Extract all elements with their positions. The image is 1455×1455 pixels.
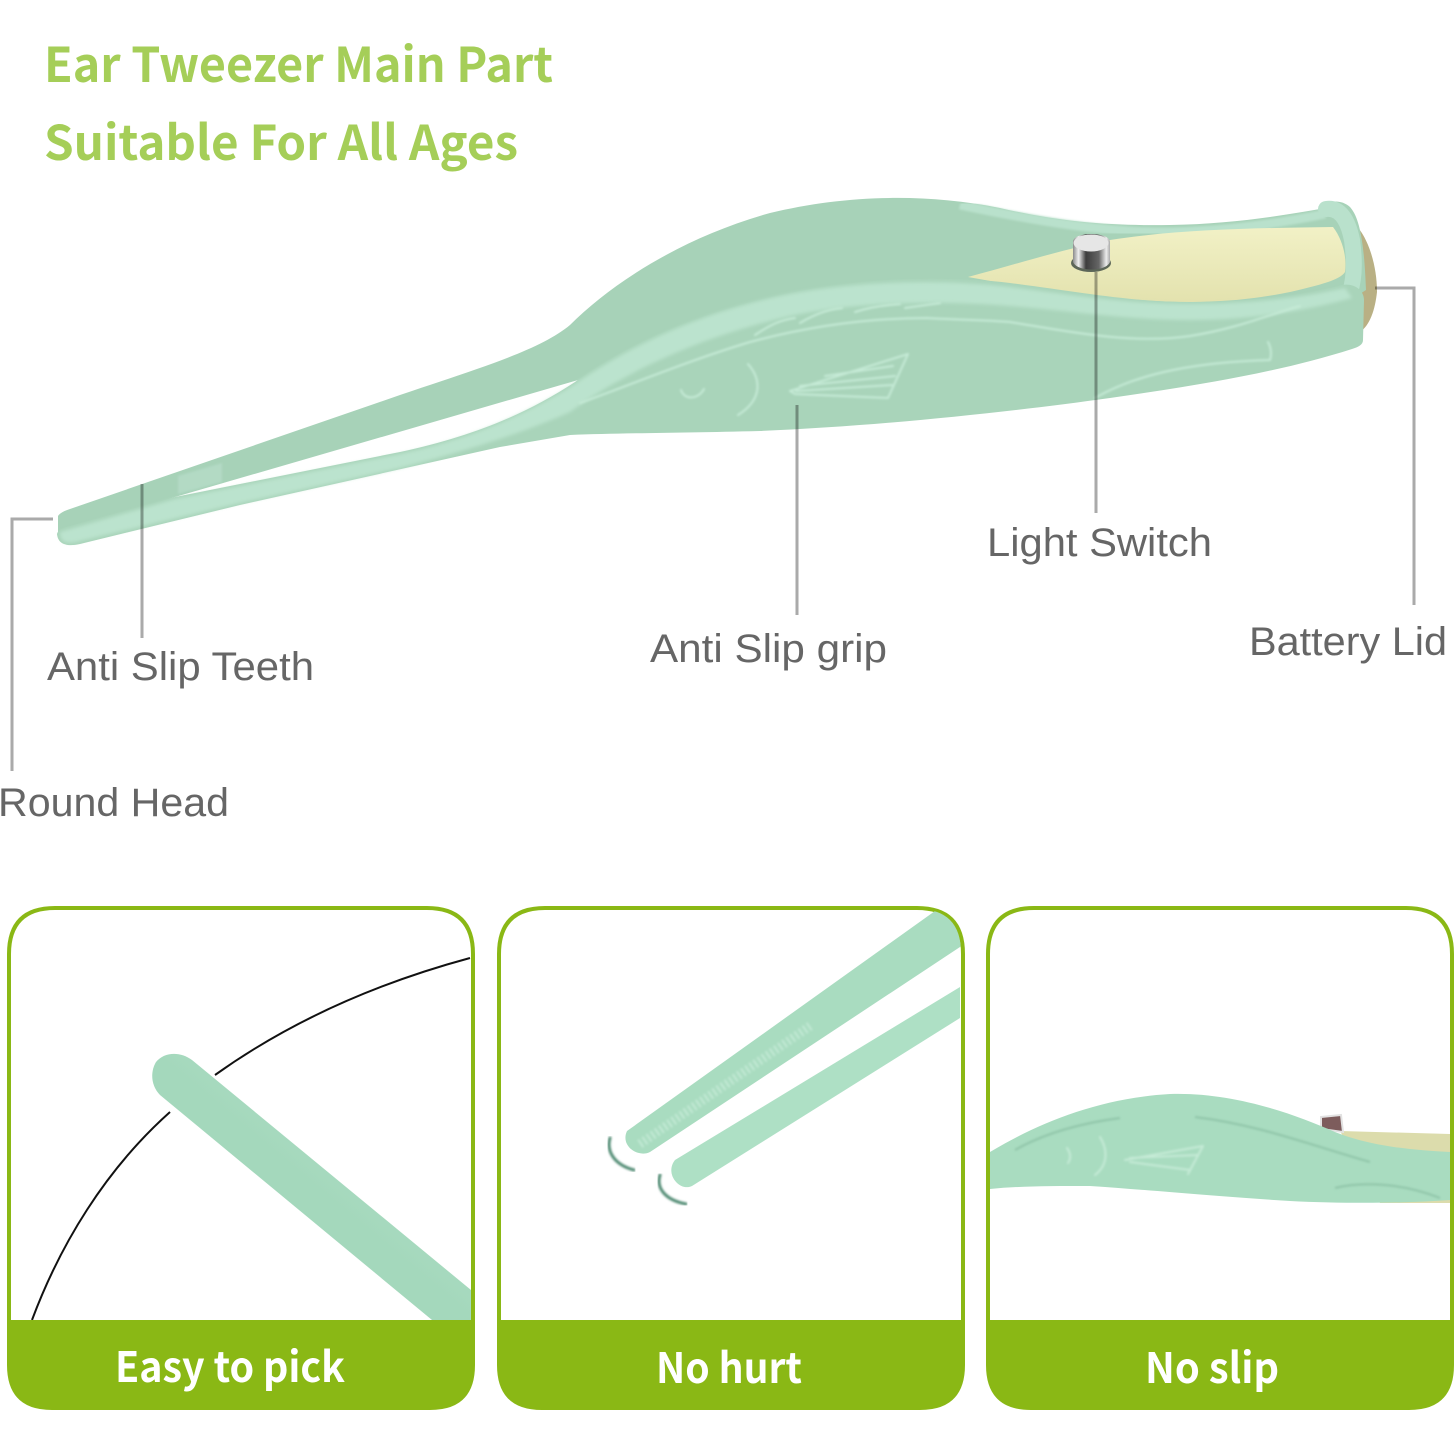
anti slip teeth texture (178, 463, 222, 494)
motion arc right (659, 1175, 686, 1204)
yellow battery insert (1340, 1131, 1450, 1203)
switch socket (1071, 254, 1111, 272)
fish scales (755, 303, 940, 335)
label: Anti Slip Teeth: Anti Slip Teeth (47, 645, 314, 689)
top rim highlight (960, 205, 1325, 232)
caption: Easy to pick (115, 1334, 346, 1395)
back arm of tweezer (58, 198, 1366, 535)
label: Light Switch: Light Switch (987, 521, 1212, 565)
light switch button (1071, 234, 1111, 272)
caption band (9, 1320, 473, 1408)
fin (1125, 1146, 1203, 1174)
panel frame (499, 908, 963, 1408)
lower tweezer arm (671, 987, 960, 1187)
main tweezer product illustration (57, 198, 1377, 545)
round tweezer tip (152, 1054, 471, 1320)
label: Anti Slip grip: Anti Slip grip (650, 627, 887, 671)
battery lid disc (1352, 222, 1377, 332)
teeth texture (640, 1026, 810, 1144)
gill and eye (1067, 1137, 1105, 1175)
panel frame (988, 908, 1452, 1408)
fish fin (790, 354, 908, 398)
switch body (1073, 234, 1110, 270)
caption: No hurt (656, 1335, 802, 1396)
front arm raised rim highlight (60, 282, 1352, 543)
heading line 1: Ear Tweezer Main Part (44, 26, 553, 96)
callout leader: anti slip grip (796, 405, 798, 615)
heading line 2: Suitable For All Ages (44, 104, 518, 174)
panel frame (9, 908, 473, 1408)
title: heading lines (44, 26, 553, 174)
upper tweezer arm with teeth (625, 911, 961, 1154)
fish body outline (580, 306, 1300, 403)
silver switch (1321, 1115, 1343, 1132)
caption band (988, 1320, 1452, 1408)
fish eye (681, 389, 704, 397)
fish engraving (580, 303, 1300, 415)
hair strand (32, 958, 470, 1320)
tail (1335, 1184, 1440, 1198)
callout leader: anti slip teeth (140, 484, 144, 638)
switch top (1074, 234, 1108, 252)
caption: No slip (1145, 1335, 1279, 1396)
tail curve (1095, 342, 1271, 398)
gill arc (738, 364, 757, 415)
panel: no slip (988, 908, 1452, 1408)
motion arc left (609, 1138, 634, 1170)
flange rim (1326, 209, 1354, 292)
grip close-up (990, 1094, 1450, 1203)
caption band (499, 1320, 963, 1408)
label: Round Head: Round Head (0, 781, 229, 825)
panel: no hurt (497, 906, 965, 1410)
panel: easy to pick (9, 908, 473, 1408)
callout leader: light switch (1094, 272, 1098, 513)
yellow battery insert (968, 227, 1346, 302)
front arm of tweezer (57, 279, 1364, 545)
engraved fish details (1015, 1117, 1440, 1198)
callout leader: battery lid (1375, 288, 1414, 605)
body line (1015, 1117, 1370, 1162)
callout leader: round head (12, 519, 53, 771)
label: Battery Lid: Battery Lid (1249, 620, 1447, 664)
